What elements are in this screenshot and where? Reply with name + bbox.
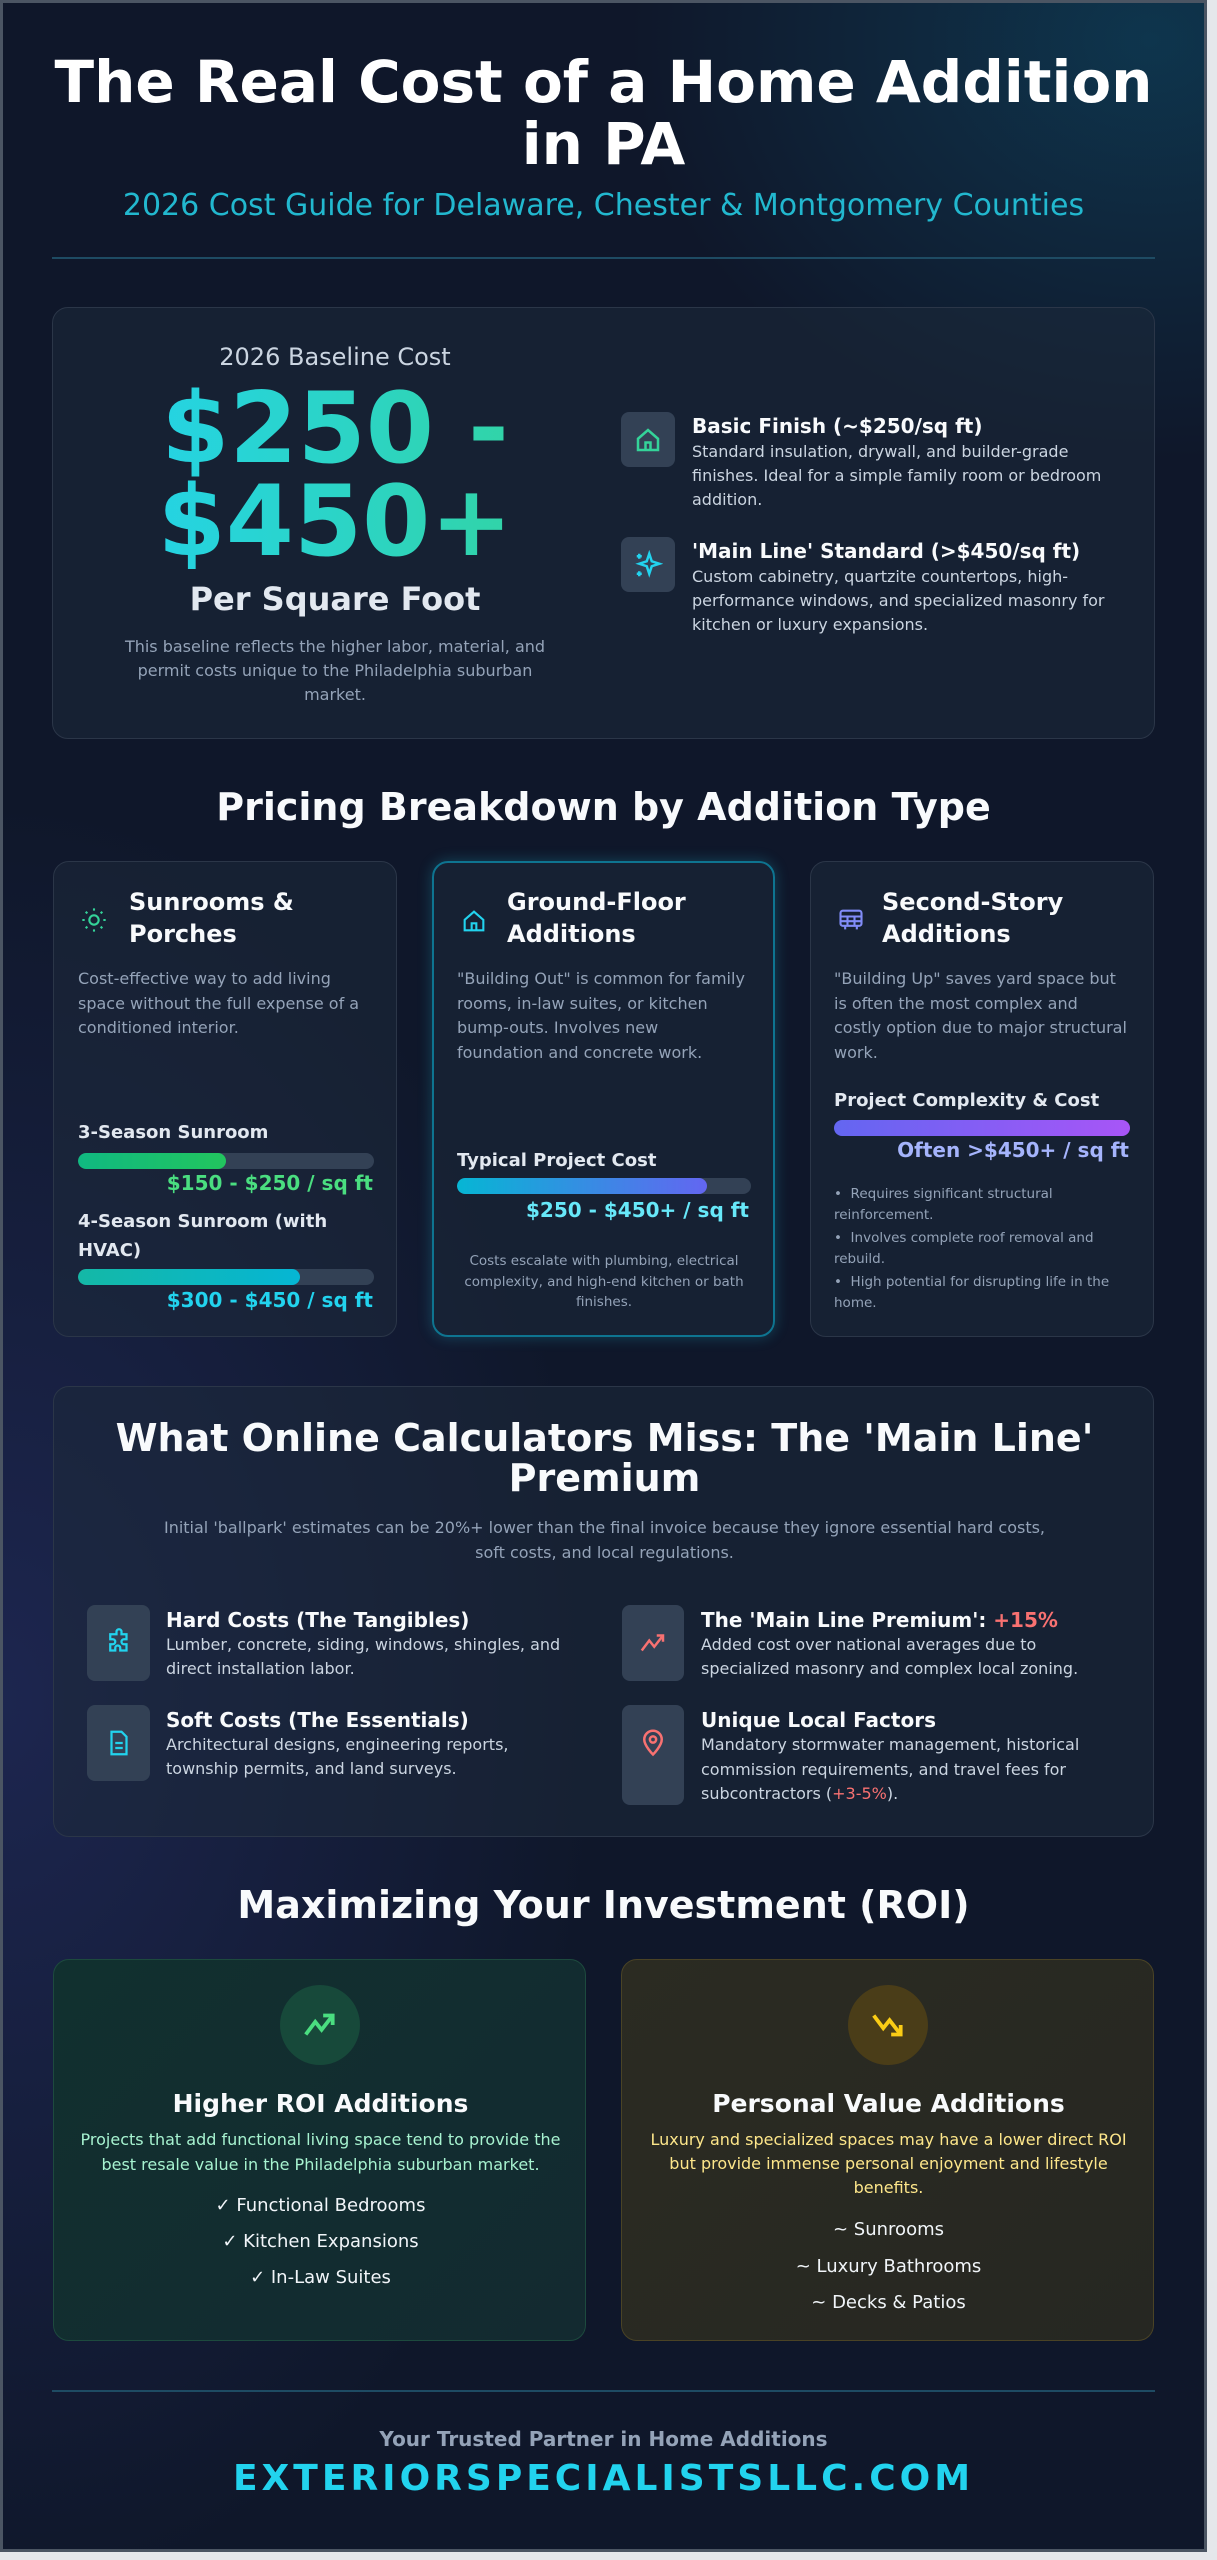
list — [796, 2219, 981, 2313]
title: Additions — [507, 920, 636, 948]
icon: house — [464, 910, 484, 932]
bullet list: • Requires significant structural reinforcement. — [834, 1186, 1053, 1222]
list — [216, 2195, 425, 2288]
bar: 3-season — [78, 1153, 374, 1169]
description: is often the most complex and — [834, 994, 1078, 1012]
description: "Building Up" saves yard space but — [834, 969, 1116, 988]
body: Lumber, concrete, siding, windows, shingles, and direct installation labor. — [166, 1635, 560, 1678]
panel: baseline cost — [52, 307, 1155, 739]
body: Standard insulation, drywall, and builder-grade finishes. Ideal for a simple family room or bedroom addition. — [692, 442, 1101, 509]
icon: sun — [82, 908, 106, 932]
per square foot: Per Square Foot — [190, 580, 480, 618]
heading: The 'Main Line Premium': +15% — [701, 1608, 1058, 1632]
title: Higher ROI Additions — [173, 2089, 468, 2118]
footer URL: EXTERIORSPECIALISTSLLC.COM — [233, 2458, 974, 2499]
list: ~ Sunrooms — [833, 2219, 944, 2240]
item: soft costs — [87, 1705, 508, 1781]
list: ✓ Functional Bedrooms — [216, 2195, 425, 2216]
title — [129, 888, 294, 948]
icon: building — [839, 910, 863, 930]
title: The Real Cost of a Home Addition — [55, 48, 1152, 116]
title: Premium — [509, 1456, 700, 1500]
heading: Soft Costs (The Essentials) — [166, 1708, 469, 1732]
description — [834, 969, 1127, 1062]
body: Mandatory stormwater management, historical commission requirements, and travel fees for subcontractors (+3-5%). — [701, 1735, 1079, 1803]
panel: sunrooms — [53, 861, 397, 1337]
item: basic finish — [621, 412, 1101, 509]
icon: trend up — [622, 1605, 684, 1681]
title — [116, 1416, 1093, 1500]
title: Additions — [882, 920, 1011, 948]
bullet list — [834, 1186, 1109, 1310]
big price range — [82, 383, 588, 569]
title: Porches — [129, 920, 237, 948]
bullet list: • High potential for disrupting life in the home. — [834, 1274, 1109, 1310]
panel: calculators miss — [53, 1386, 1154, 1837]
baseline note: This baseline reflects the higher labor, material, and permit costs unique to the Philadelphia suburban market. — [125, 637, 545, 704]
bar: 4-season — [78, 1269, 374, 1285]
title — [882, 888, 1063, 948]
panel: personal value — [621, 1959, 1154, 2341]
body: Added cost over national averages due to specialized masonry and complex local zoning. — [701, 1635, 1078, 1678]
title: Ground-Floor — [507, 888, 686, 916]
big price range: $450+ — [158, 465, 512, 579]
item: main line premium — [622, 1605, 1078, 1681]
note: Costs escalate with plumbing, electrical complexity, and high-end kitchen or bath finishes. — [464, 1253, 744, 1310]
panel: higher ROI — [53, 1959, 586, 2341]
icon: trend down circle — [848, 1985, 928, 2065]
description: work. — [834, 1042, 878, 1062]
cost label: Typical Project Cost — [457, 1150, 656, 1171]
icon: trend up circle — [280, 1985, 360, 2065]
bar: complexity — [834, 1120, 1130, 1136]
list: ✓ In-Law Suites — [250, 2267, 391, 2288]
icon: map pin — [622, 1705, 684, 1805]
panel: second-story — [810, 861, 1154, 1337]
description: Projects that add functional living space tend to provide the best resale value in the Philadelphia suburban market. — [81, 2130, 560, 2174]
heading: pricing breakdown: Pricing Breakdown by Addition Type — [216, 785, 991, 829]
description: costly option due to major structural — [834, 1018, 1127, 1037]
icon: document — [87, 1705, 150, 1781]
title — [54, 48, 1152, 178]
heading: Hard Costs (The Tangibles) — [166, 1608, 469, 1632]
panel: ground-floor — [432, 861, 775, 1337]
list: ~ Luxury Bathrooms — [796, 2256, 981, 2276]
heading: Basic Finish (~$250/sq ft) — [692, 414, 982, 438]
description: Cost-effective way to add living space without the full expense of a conditioned interior. — [78, 969, 359, 1037]
heading: Unique Local Factors — [701, 1708, 936, 1732]
big price range: $250 - — [161, 372, 509, 486]
value: 4-season: $300 - $450 / sq ft — [167, 1288, 373, 1312]
4-season label: 4-Season Sunroom (with HVAC) — [78, 1211, 327, 1261]
value: 3-season: $150 - $250 / sq ft — [167, 1171, 373, 1195]
list: ✓ Kitchen Expansions — [222, 2231, 419, 2252]
value: $250 - $450+ / sq ft — [526, 1198, 749, 1222]
subtitle: 2026 Cost Guide for Delaware, Chester & Montgomery Counties — [123, 188, 1084, 223]
title: in PA — [522, 110, 685, 178]
body: Architectural designs, engineering reports, township permits, and land surveys. — [166, 1735, 508, 1778]
icon: sparkle — [621, 537, 675, 592]
description: "Building Out" is common for family rooms, in-law suites, or kitchen bump-outs. Involves new foundation and concrete work. — [457, 969, 745, 1062]
title: Second-Story — [882, 888, 1063, 916]
heading: 'Main Line' Standard (>$450/sq ft) — [692, 539, 1080, 563]
list: ~ Decks & Patios — [811, 2292, 966, 2313]
footer tagline: Your Trusted Partner in Home Additions — [379, 2427, 828, 2451]
item: main line standard — [621, 537, 1104, 634]
3-season label: 3-Season Sunroom — [78, 1122, 268, 1143]
bar: ground-floor — [457, 1178, 751, 1194]
title: What Online Calculators Miss: The 'Main Line' — [116, 1416, 1093, 1460]
item: hard costs — [87, 1605, 560, 1681]
heading: ROI: Maximizing Your Investment (ROI) — [237, 1883, 970, 1927]
complexity label: Project Complexity & Cost — [834, 1090, 1099, 1111]
title: Sunrooms & — [129, 888, 294, 916]
title — [507, 888, 686, 948]
icon: house — [621, 412, 675, 467]
icon: puzzle — [87, 1605, 150, 1681]
description: Luxury and specialized spaces may have a lower direct ROI but provide immense personal enjoyment and lifestyle benefits. — [650, 2130, 1127, 2197]
intro: Initial 'ballpark' estimates can be 20%+ lower than the final invoice because they ignore essential hard costs, soft costs, and local regulations. — [164, 1518, 1045, 1562]
body: Custom cabinetry, quartzite countertops, high-performance windows, and specialized masonry for kitchen or luxury expansions. — [692, 567, 1104, 634]
title: Personal Value Additions — [712, 2089, 1065, 2118]
item: local factors — [622, 1705, 1079, 1805]
bullet list: • Involves complete roof removal and rebuild. — [834, 1230, 1094, 1266]
value: Often >$450+ / sq ft — [897, 1138, 1129, 1162]
baseline label: 2026 Baseline Cost — [219, 343, 451, 371]
